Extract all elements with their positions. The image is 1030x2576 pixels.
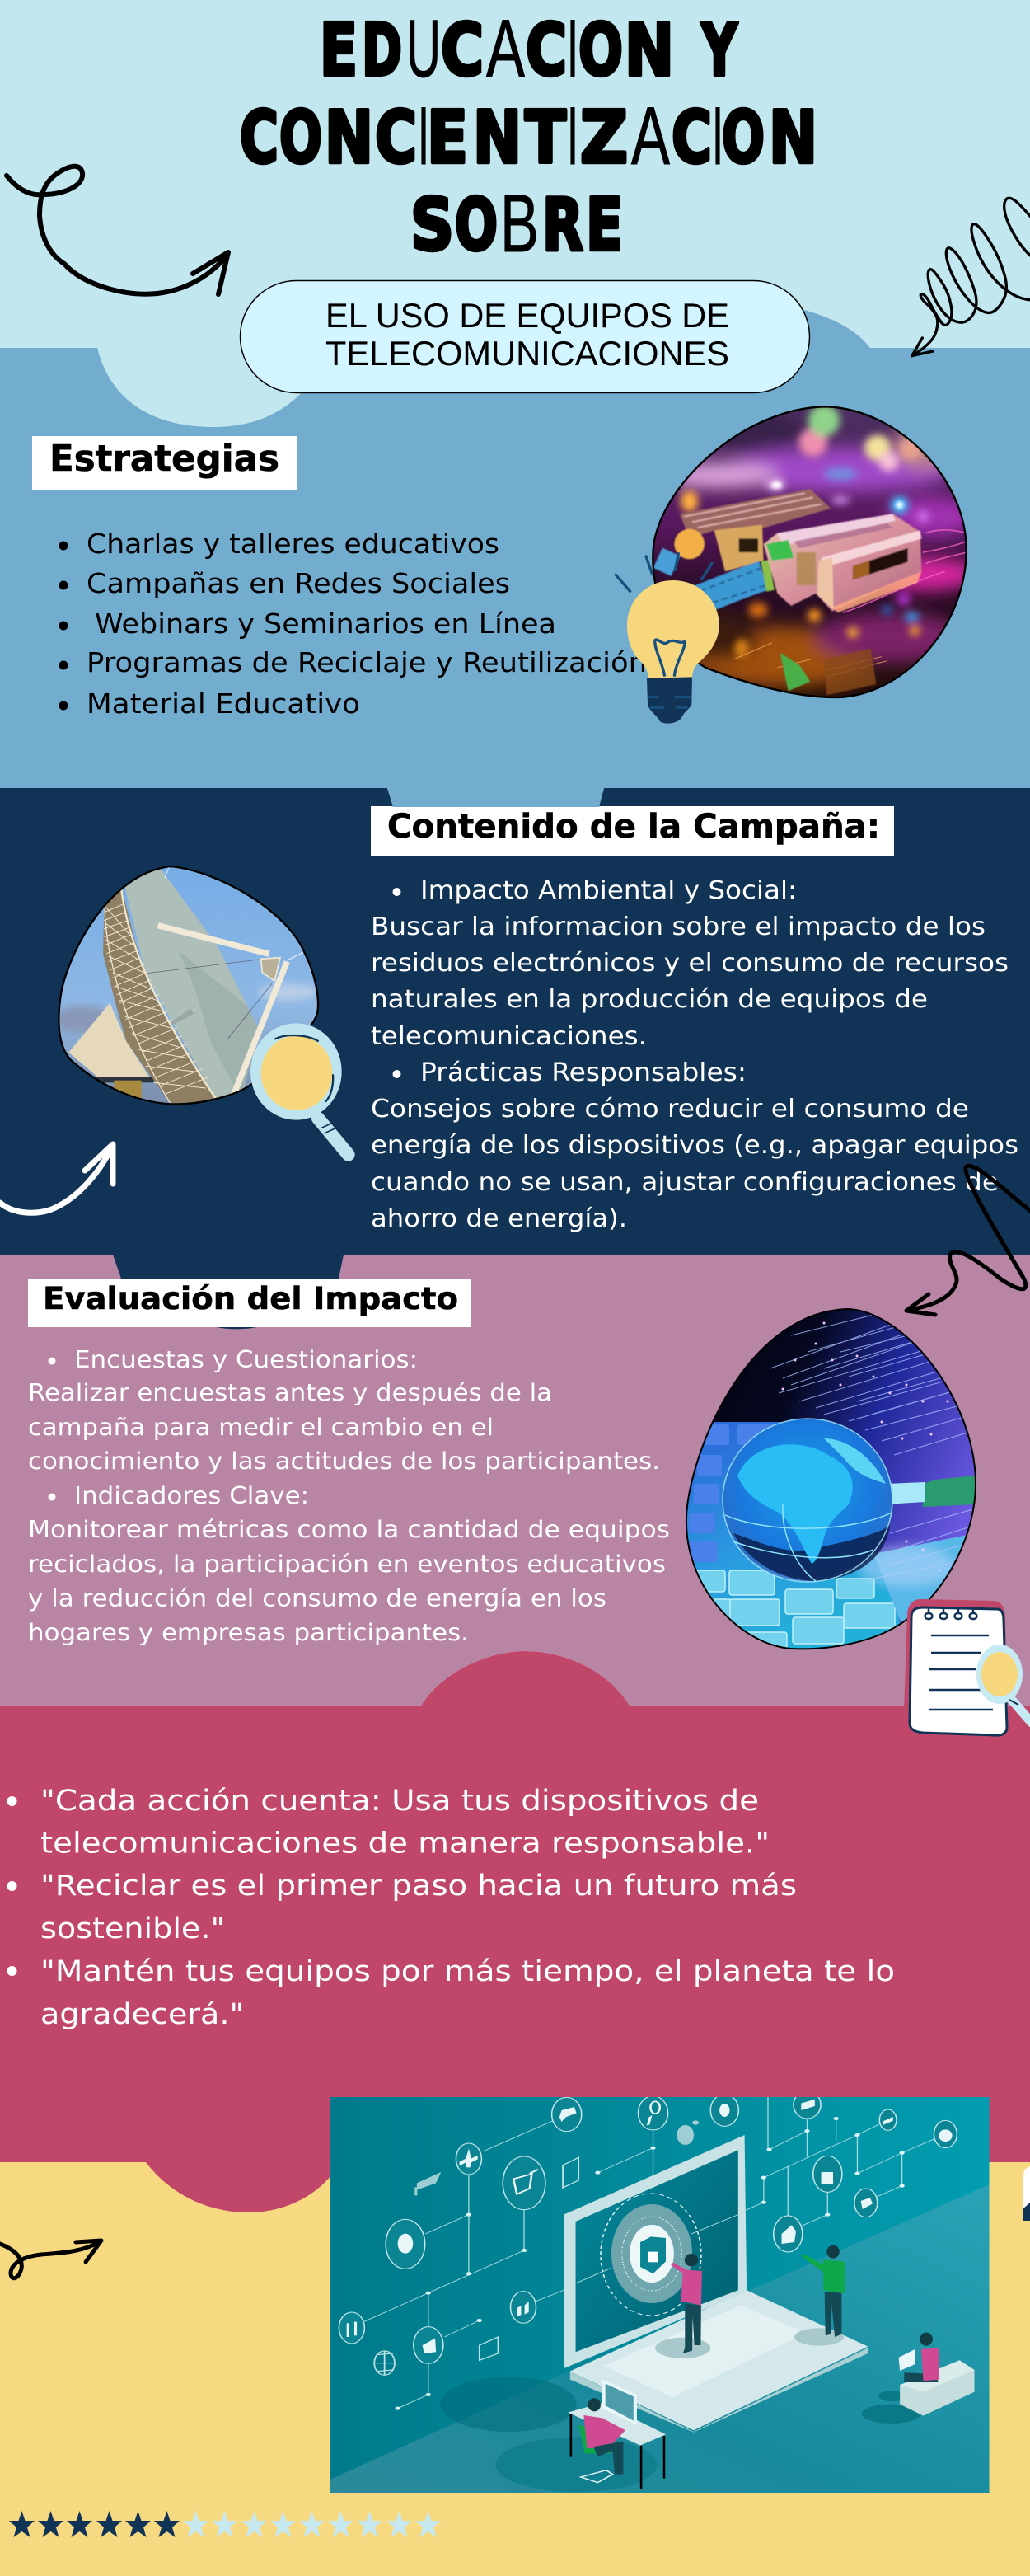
laptop <box>564 2135 868 2433</box>
yellow footer band <box>0 2162 1030 2576</box>
title <box>240 2 817 269</box>
heading: Contenido de la Campaña: Contenido de la Campaña: <box>387 808 880 846</box>
title: S <box>410 183 454 267</box>
arrow: curly top left <box>7 167 228 294</box>
text block: evaluation: reciclados, la participación en eventos educativos <box>28 1551 666 1578</box>
title: R <box>542 183 583 267</box>
text block: campaign content: Impacto Ambiental y Social: <box>420 876 797 905</box>
strategy list: Webinars y Seminarios en Línea <box>95 608 556 640</box>
text block: campaign content: ahorro de energía). <box>371 1204 627 1233</box>
title: D <box>362 8 402 92</box>
title: I <box>712 90 723 181</box>
text block: campaign content: Consejos sobre cómo reducir el consumo de <box>371 1095 969 1124</box>
title: T <box>525 96 566 180</box>
photo: satellite dish <box>52 863 327 1110</box>
title: O <box>455 183 498 267</box>
title: N <box>325 96 373 180</box>
strategy list: Material Educativo <box>87 687 360 720</box>
text block: campaign content: residuos electrónicos y el consumo de recursos <box>371 949 1009 978</box>
title: Z <box>580 96 628 180</box>
arrow: curly footer arrow <box>0 2241 101 2278</box>
crimson band with bumps <box>0 1651 1030 2212</box>
strategy list <box>59 528 647 720</box>
title: Y <box>700 8 738 92</box>
front connector <box>764 514 921 612</box>
heading: Evaluación del Impacto: Evaluación del Impacto <box>43 1281 458 1316</box>
cables <box>658 558 676 566</box>
title: U <box>406 2 441 94</box>
title: A <box>631 90 670 181</box>
panel: slogans <box>0 1651 1030 2493</box>
text block: evaluation: campaña para medir el cambio en el <box>28 1414 494 1441</box>
title: N <box>473 96 522 180</box>
text block: campaign content <box>371 876 1018 1233</box>
strategy list: Campañas en Redes Sociales <box>87 567 510 599</box>
title: N <box>625 8 674 92</box>
streak lines <box>843 530 967 612</box>
text block: evaluation: Encuestas y Cuestionarios: <box>74 1346 418 1373</box>
photo: network cable connectors <box>648 404 978 701</box>
text block: campaign content: naturales en la producción de equipos de <box>371 985 928 1014</box>
title: I <box>567 2 578 94</box>
subtitle pill: TELECOMUNICACIONES <box>325 334 729 373</box>
title: C <box>240 96 279 180</box>
photo: globe on keyboard with optic fibres <box>680 1302 981 1657</box>
icon: light bulb <box>616 554 719 724</box>
text block: evaluation: Monitorear métricas como la cantidad de equipos <box>28 1516 670 1543</box>
panel: evaluacion del impacto <box>0 1255 1030 1735</box>
network icon nodes <box>339 2091 957 2363</box>
strategy list: Programas de Reciclaje y Reutilización <box>87 646 647 678</box>
small line icons <box>374 2157 578 2375</box>
arrow: spiral top right <box>912 198 1030 356</box>
light blue band with blob <box>0 0 1030 427</box>
slogan list: agradecerá." <box>40 1998 244 2031</box>
title: C <box>375 96 417 180</box>
title: B <box>500 177 539 269</box>
icon: magnifying glass <box>250 1023 349 1155</box>
slogan list: "Reciclar es el primer paso hacia un futuro más <box>40 1870 797 1903</box>
title: O <box>722 96 765 180</box>
slogan list: telecomunicaciones de manera responsable." <box>40 1827 770 1860</box>
title: O <box>279 96 322 180</box>
text block: campaign content: telecomunicaciones. <box>371 1022 647 1051</box>
text block: campaign content: cuando no se usan, ajustar configuraciones de <box>371 1168 999 1197</box>
slogan list: sostenible." <box>40 1912 225 1945</box>
text block: campaign content: energía de los dispositivos (e.g., apagar equipos <box>371 1131 1018 1160</box>
subtitle pill: EL USO DE EQUIPOS DE <box>325 296 729 335</box>
icon: notebook with magnifier <box>904 1599 1030 1735</box>
panel: header <box>0 0 1030 427</box>
heading: Evaluación del Impacto <box>28 1279 471 1327</box>
slogan list: "Mantén tus equipos por más tiempo, el planeta te lo <box>40 1955 895 1988</box>
arrow: white curved arrow <box>0 1144 113 1213</box>
people <box>568 2245 974 2489</box>
text block: evaluation: Realizar encuestas antes y después de la <box>28 1379 552 1406</box>
title: C <box>441 8 484 92</box>
blue band with bumps <box>0 302 1030 807</box>
title: E <box>427 96 468 180</box>
title: I <box>418 90 429 181</box>
title: C <box>526 8 567 92</box>
title: E <box>586 183 623 267</box>
panel: closing image and footer <box>0 2162 1030 2576</box>
stars rating row <box>9 2511 441 2537</box>
text block: campaign content: Buscar la informacion sobre el impacto de los <box>371 913 986 941</box>
illustration: isometric laptop and network <box>330 2091 990 2493</box>
title: N <box>769 96 817 180</box>
slogan list: "Cada acción cuenta: Usa tus dispositivos de <box>40 1785 759 1818</box>
text block: evaluation: conocimiento y las actitudes de los participantes. <box>28 1448 660 1475</box>
subtitle pill <box>241 280 809 392</box>
slogan list <box>7 1785 895 2031</box>
cropped sticker at right edge <box>1023 2166 1030 2221</box>
title: C <box>672 96 712 180</box>
title: A <box>486 2 525 94</box>
panel: contenido de la campana <box>0 788 1030 1329</box>
heading: Estrategias <box>32 436 297 490</box>
text block: evaluation: Indicadores Clave: <box>74 1482 309 1509</box>
rear connector <box>658 489 921 695</box>
arrow: black wiggly arrow <box>906 1166 1030 1315</box>
text block: campaign content: Prácticas Responsables: <box>420 1058 747 1087</box>
mauve band with notch <box>0 1255 1030 1706</box>
network lines <box>363 2094 934 2409</box>
panel: estrategias <box>0 302 1030 807</box>
text block: evaluation <box>28 1346 670 1646</box>
heading: Estrategias: Estrategias <box>49 438 279 480</box>
text block: evaluation: y la reducción del consumo de energía en los <box>28 1584 606 1612</box>
title: E <box>320 8 358 92</box>
text block: evaluation: hogares y empresas participantes. <box>28 1619 469 1646</box>
strategy list: Charlas y talleres educativos <box>87 528 499 560</box>
title: I <box>567 90 578 181</box>
title: O <box>578 8 623 92</box>
navy band with bottom bump <box>0 788 1030 1329</box>
